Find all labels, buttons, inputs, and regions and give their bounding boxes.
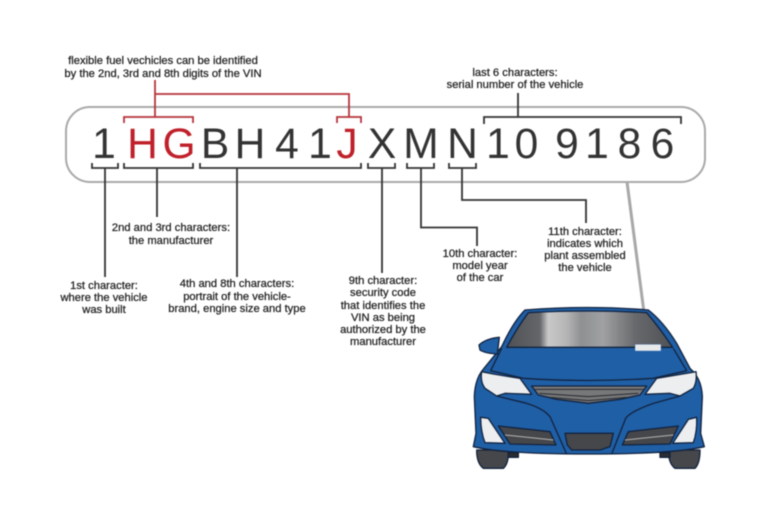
label: flexible fuel [64, 55, 262, 80]
lower bracket: 4th to 8th characters [200, 163, 361, 277]
lower bracket: 9th character [368, 163, 395, 273]
label: 11th character: indicates which [547, 238, 623, 250]
label: 10th character: of the car [457, 272, 504, 284]
label: 1st character: where the vehicle [59, 292, 148, 304]
icon: blue car front view [473, 307, 704, 468]
label: 11th character: plant assembled [544, 250, 626, 262]
lower bracket: 10th character [407, 163, 477, 246]
label: 2nd and 3rd characters: 2nd and 3rd characters: [112, 222, 230, 234]
label: 2nd and 3rd characters [112, 222, 230, 247]
label: 9th character: that identifies the [341, 300, 425, 312]
label: 10th character: 10th character: [443, 248, 517, 260]
VIN characters: 8 [618, 121, 641, 168]
VIN characters: H [235, 121, 265, 168]
VIN characters: 0 [515, 121, 538, 168]
VIN characters: 1 [92, 121, 116, 168]
VIN characters [92, 121, 674, 168]
VIN characters: 9 [555, 121, 579, 168]
label: 9th character: security code [350, 287, 416, 299]
VIN characters: 1 [585, 121, 609, 168]
lower bracket: 1st character [92, 163, 118, 277]
label: 4th and 8th characters: portrait of the vehicle- [183, 291, 291, 303]
label: last 6 characters: last 6 characters: [472, 67, 558, 79]
VIN characters: 1 [486, 121, 510, 168]
label: 1st character [59, 280, 148, 316]
VIN rounded box [66, 107, 705, 182]
label: 1st character: 1st character: [70, 280, 138, 292]
lower bracket: 2nd and 3rd characters [124, 163, 193, 217]
serial number bracket [484, 93, 681, 124]
label: 11th character: 11th character: [548, 226, 622, 238]
VIN characters: H [127, 121, 158, 168]
VIN characters: B [201, 121, 229, 168]
VIN characters: N [447, 121, 478, 168]
label: 1st character: was built [81, 304, 127, 316]
label: 4th and 8th characters: 4th and 8th characters: [180, 278, 294, 290]
label: 2nd and 3rd characters: the manufacturer [129, 235, 214, 247]
label: 10th character [443, 248, 517, 284]
label: 9th character: authorized by the [340, 324, 426, 336]
pointer from VIN box to windshield plate [627, 182, 648, 343]
label: flexible fuel: by the 2nd, 3rd and 8th digits of the VIN [64, 68, 262, 80]
VIN characters: G [162, 121, 196, 168]
label: 11th character: the vehicle [558, 262, 612, 274]
VIN characters: X [368, 121, 396, 168]
label: 9th character [340, 275, 426, 348]
label: 4th and 8th characters: brand, engine size and type [168, 303, 306, 315]
VIN characters: M [403, 121, 439, 168]
label: 9th character: manufacturer [350, 336, 416, 348]
label: 4th and 8th characters [168, 278, 306, 315]
label: 11th character [544, 226, 626, 274]
label: 10th character: model year [452, 260, 508, 272]
label: 9th character: 9th character: [349, 275, 417, 287]
red flex-fuel bracket connector [124, 80, 361, 123]
label: last 6 characters: serial number of the vehicle [447, 79, 583, 91]
lower bracket: 11th character [449, 163, 586, 223]
VIN characters: 1 [308, 121, 332, 168]
VIN characters: 6 [651, 121, 674, 168]
VIN characters: 4 [275, 121, 299, 168]
label: flexible fuel: flexible fuel vechicles can be identified [68, 55, 258, 67]
label: 9th character: VIN as being [351, 312, 415, 324]
label: last 6 characters [447, 67, 583, 91]
VIN characters: J [336, 121, 358, 168]
